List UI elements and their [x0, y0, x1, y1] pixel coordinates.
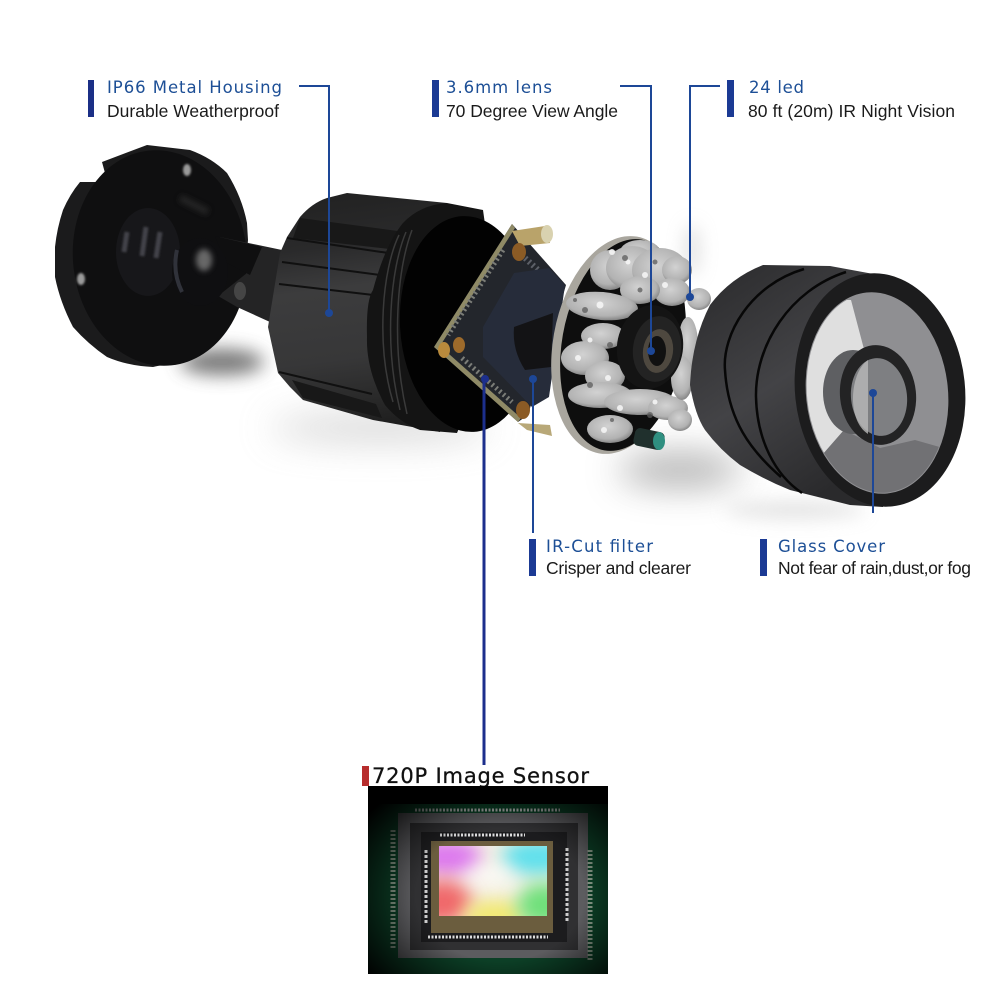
- housing opening: [394, 213, 542, 435]
- threaded collar: [367, 203, 500, 433]
- callout: 3.6mm lens: [432, 78, 655, 355]
- callout: IP66 Metal Housing: [88, 78, 333, 317]
- callout: 24 led: 80 ft (20m) IR Night Vision: [748, 101, 955, 121]
- lens module: [483, 268, 565, 407]
- sensor photo: [368, 786, 608, 974]
- sensor board: [434, 224, 566, 436]
- bond wires: [428, 835, 548, 937]
- lens barrel: [514, 313, 553, 370]
- ball joint: [172, 238, 228, 306]
- arm bolt: [234, 282, 246, 300]
- connector line: image sensor: [481, 375, 489, 765]
- callout: IR-Cut filter: Crisper and clearer: [546, 558, 691, 578]
- glass cover: [690, 265, 977, 515]
- photoresistor: [632, 427, 666, 451]
- callout: IR-Cut filter: IR-Cut filter: [546, 537, 653, 556]
- LED ring board: [535, 225, 711, 465]
- callout: Glass Cover: Not fear of rain,dust,or fog: [778, 558, 971, 578]
- infrared LEDs: [561, 240, 711, 443]
- brass standoffs: [512, 226, 550, 246]
- callout: 24 led: [686, 78, 955, 301]
- camera mount bracket: [55, 141, 282, 375]
- callout: 24 led: 24 led: [749, 78, 804, 97]
- bracket arm: [218, 237, 282, 322]
- callout: 3.6mm lens: 70 Degree View Angle: [446, 101, 618, 121]
- callout: Glass Cover: [760, 389, 971, 578]
- drop shadows: [180, 224, 865, 518]
- callout: Glass Cover: Glass Cover: [778, 537, 885, 556]
- photo vignette: [368, 786, 608, 974]
- camera lens: [611, 301, 689, 393]
- callout: IP66 Metal Housing: Durable Weatherproof: [107, 101, 279, 121]
- heading: 720P Image Sensor: 720P Image Sensor: [372, 764, 589, 788]
- rainbow sensor area: [439, 846, 547, 916]
- camera housing: [268, 193, 542, 435]
- glass reflections: [806, 300, 939, 493]
- callout: IR-Cut filter: [529, 375, 691, 578]
- callout: 3.6mm lens: 3.6mm lens: [446, 78, 552, 97]
- callout: IP66 Metal Housing: IP66 Metal Housing: [107, 78, 282, 97]
- inner glass lens: [823, 350, 883, 434]
